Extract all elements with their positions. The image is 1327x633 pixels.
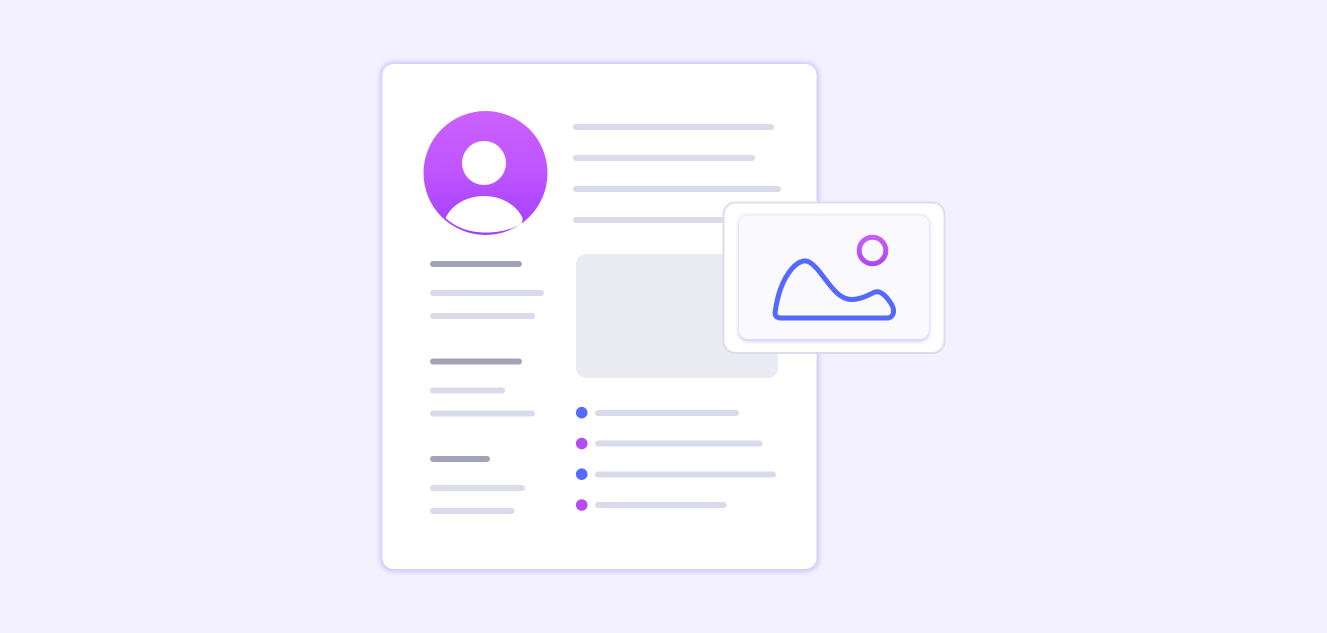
icon: sun ring [859,237,886,264]
header text lines [573,124,781,223]
sidebar section 2 [430,358,535,416]
image placeholder [576,254,778,378]
sidebar section 3 [430,456,525,514]
bullet list [576,407,776,511]
sidebar section 1 [430,261,544,319]
icon: profile avatar [424,111,548,235]
icon: mountain [775,261,894,318]
panel: floating image card [724,202,944,353]
image frame [738,215,930,342]
panel: resume page [380,62,820,572]
